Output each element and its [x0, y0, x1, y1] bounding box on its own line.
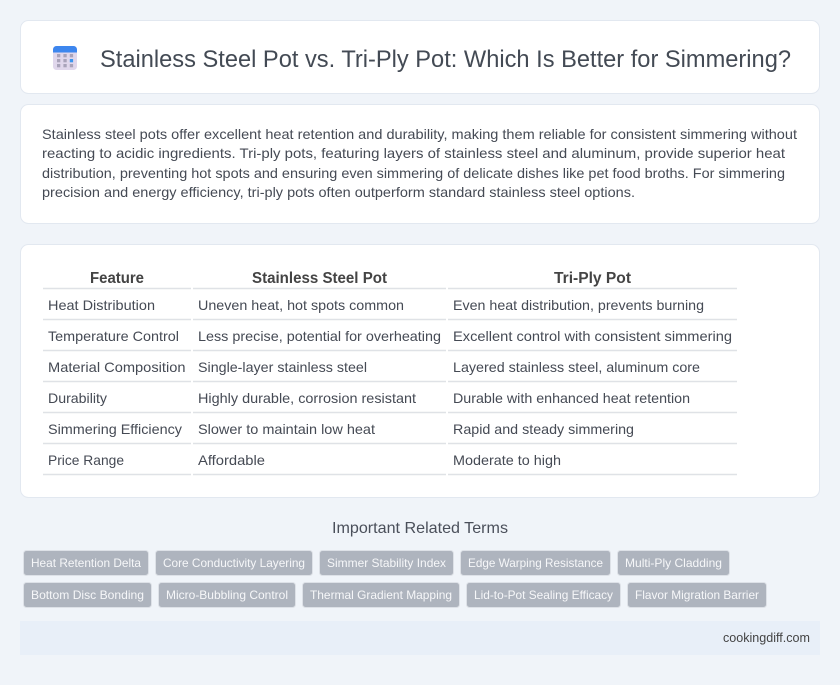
panel: introduction text: reacting to acidic ingredients. Tri-ply pots, featuring layers of stainless steel and aluminum, provide superior heat — [42, 145, 785, 161]
tag: Simmer Stability Index — [327, 556, 446, 570]
row: heat distribution — [48, 297, 704, 313]
row: temperature control — [48, 328, 732, 344]
tag: Micro-Bubbling Control — [166, 588, 288, 602]
tag: Flavor Migration Barrier — [635, 588, 759, 602]
row: simmering efficiency: Slower to maintain low heat — [198, 421, 375, 437]
tag: Edge Warping Resistance — [468, 556, 603, 570]
row: temperature control: Less precise, potential for overheating — [198, 328, 441, 344]
tag — [628, 582, 766, 608]
panel: introduction text: precision and energy efficiency, tri-ply pots often outperform standard stainless steel options. — [42, 184, 635, 200]
row: simmering efficiency — [48, 421, 634, 437]
tag: Bottom Disc Bonding — [31, 588, 144, 602]
row: durability: Durable with enhanced heat retention — [453, 390, 690, 406]
footer — [20, 621, 820, 655]
table header: Feature — [90, 270, 144, 287]
table header: Tri-Ply Pot — [554, 270, 632, 287]
row: price range: Price Range — [48, 452, 124, 468]
table header — [90, 270, 632, 287]
row: heat distribution: Even heat distribution, prevents burning — [453, 297, 704, 313]
related term tags — [24, 550, 766, 608]
tag: Thermal Gradient Mapping — [310, 588, 452, 602]
row: durability — [48, 390, 690, 406]
heading: related terms: Important Related Terms — [332, 520, 508, 537]
row: simmering efficiency: Simmering Efficiency — [48, 421, 182, 437]
row: price range: Affordable — [198, 452, 265, 468]
tag: Lid-to-Pot Sealing Efficacy — [474, 588, 613, 602]
footer: cookingdiff.com — [723, 630, 810, 645]
icon: calendar — [53, 46, 77, 70]
tag — [24, 582, 152, 608]
tag — [466, 582, 620, 608]
row: material composition: Single-layer stainless steel — [198, 359, 367, 375]
row: durability: Highly durable, corrosion resistant — [198, 390, 416, 406]
tag — [320, 550, 454, 576]
panel: title header — [20, 20, 820, 94]
tag: Multi-Ply Cladding — [625, 556, 722, 570]
panel: comparison table — [20, 244, 820, 498]
row: heat distribution: Uneven heat, hot spots common — [198, 297, 404, 313]
row: temperature control: Temperature Control — [48, 328, 179, 344]
panel: introduction text — [20, 104, 820, 224]
row: heat distribution: Heat Distribution — [48, 297, 155, 313]
row: durability: Durability — [48, 390, 107, 406]
tag — [460, 550, 610, 576]
title: Stainless Steel Pot vs. Tri-Ply Pot: Which Is Better for Simmering? — [100, 46, 791, 73]
panel: introduction text: distribution, preventing hot spots and ensuring even simmering of delicate dishes like pet food broths. For simmering — [42, 165, 785, 181]
tag — [158, 582, 296, 608]
tag: Heat Retention Delta — [31, 556, 141, 570]
tag — [618, 550, 730, 576]
row: material composition: Layered stainless steel, aluminum core — [453, 359, 700, 375]
tag: Core Conductivity Layering — [163, 556, 305, 570]
panel: introduction text: Stainless steel pots offer excellent heat retention and durability, making them reliable for consistent simmering without — [42, 126, 797, 142]
tag — [24, 550, 148, 576]
tag — [302, 582, 460, 608]
row: material composition — [48, 359, 700, 375]
row: price range — [48, 452, 561, 468]
tag — [156, 550, 312, 576]
row: temperature control: Excellent control with consistent simmering — [453, 328, 732, 344]
row: price range: Moderate to high — [453, 452, 561, 468]
row: simmering efficiency: Rapid and steady simmering — [453, 421, 634, 437]
table header: Stainless Steel Pot — [252, 270, 388, 287]
row: material composition: Material Composition — [48, 359, 186, 375]
